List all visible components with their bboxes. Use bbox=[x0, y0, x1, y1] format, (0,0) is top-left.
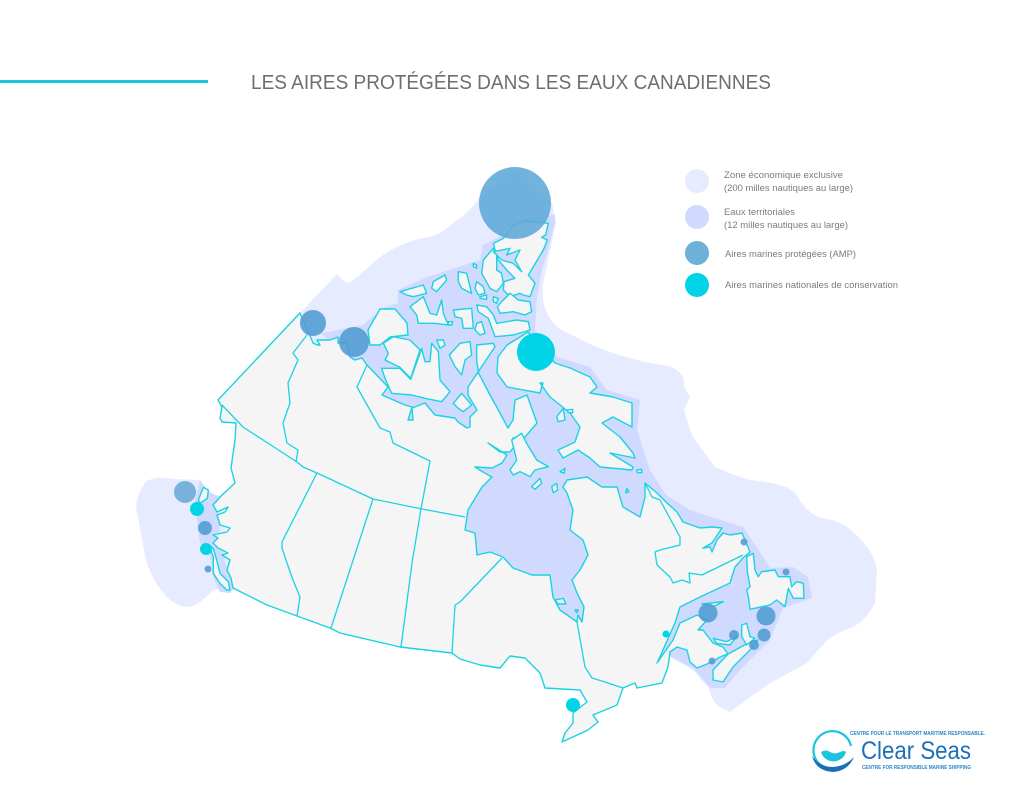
Clear Seas logo: Clear Seas bbox=[861, 737, 971, 765]
Hudson Bay and Atlantic islands bbox=[510, 408, 804, 645]
title: LES AIRES PROTÉGÉES DANS LES EAUX CANADIENNES bbox=[251, 71, 771, 94]
legend item: territorial waters: (12 milles nautiques au large) bbox=[724, 220, 848, 230]
legend item: exclusive economic zone bbox=[685, 169, 853, 193]
legend item: territorial waters: Eaux territoriales bbox=[724, 207, 796, 217]
legend item: territorial waters bbox=[685, 205, 848, 230]
legend item: national marine conservation areas: Aires marines nationales de conservation bbox=[725, 280, 898, 290]
legend item: exclusive economic zone: (200 milles nautiques au large) bbox=[724, 183, 853, 193]
Pacific islands bbox=[198, 487, 230, 590]
legend bbox=[685, 169, 898, 297]
exclusive economic zone: west coast bbox=[136, 478, 232, 607]
Queen Elizabeth islands, north bbox=[432, 221, 548, 315]
heading accent line bbox=[0, 80, 208, 83]
national marine conservation areas (cyan circles) bbox=[190, 333, 670, 712]
marine protected areas (blue circles) bbox=[174, 167, 790, 664]
Clear Seas logo: CENTRE FOR RESPONSIBLE MARINE SHIPPING bbox=[862, 765, 971, 771]
Arctic archipelago islands bbox=[382, 285, 530, 412]
legend item: marine protected areas: Aires marines protégées (AMP) bbox=[725, 249, 856, 259]
map of Canada bbox=[136, 167, 877, 742]
Baffin Island bbox=[497, 332, 635, 470]
icon: logo ring and wave bbox=[812, 731, 854, 772]
Clear Seas logo bbox=[812, 731, 985, 772]
legend item: marine protected areas bbox=[685, 241, 856, 265]
Banks island bbox=[368, 309, 408, 345]
legend item: national marine conservation areas bbox=[685, 273, 898, 297]
territorial waters: Arctic, Hudson Bay and Atlantic bbox=[300, 215, 812, 688]
Clear Seas logo: CENTRE POUR LE TRANSPORT MARITIME RESPONSABLE. bbox=[850, 731, 985, 737]
mainland bbox=[213, 313, 758, 742]
exclusive economic zone: north and east bbox=[300, 170, 877, 712]
provincial and territorial borders bbox=[222, 335, 743, 688]
territorial waters: west coast bbox=[195, 480, 235, 593]
legend item: exclusive economic zone: Zone économique exclusive bbox=[724, 170, 843, 180]
